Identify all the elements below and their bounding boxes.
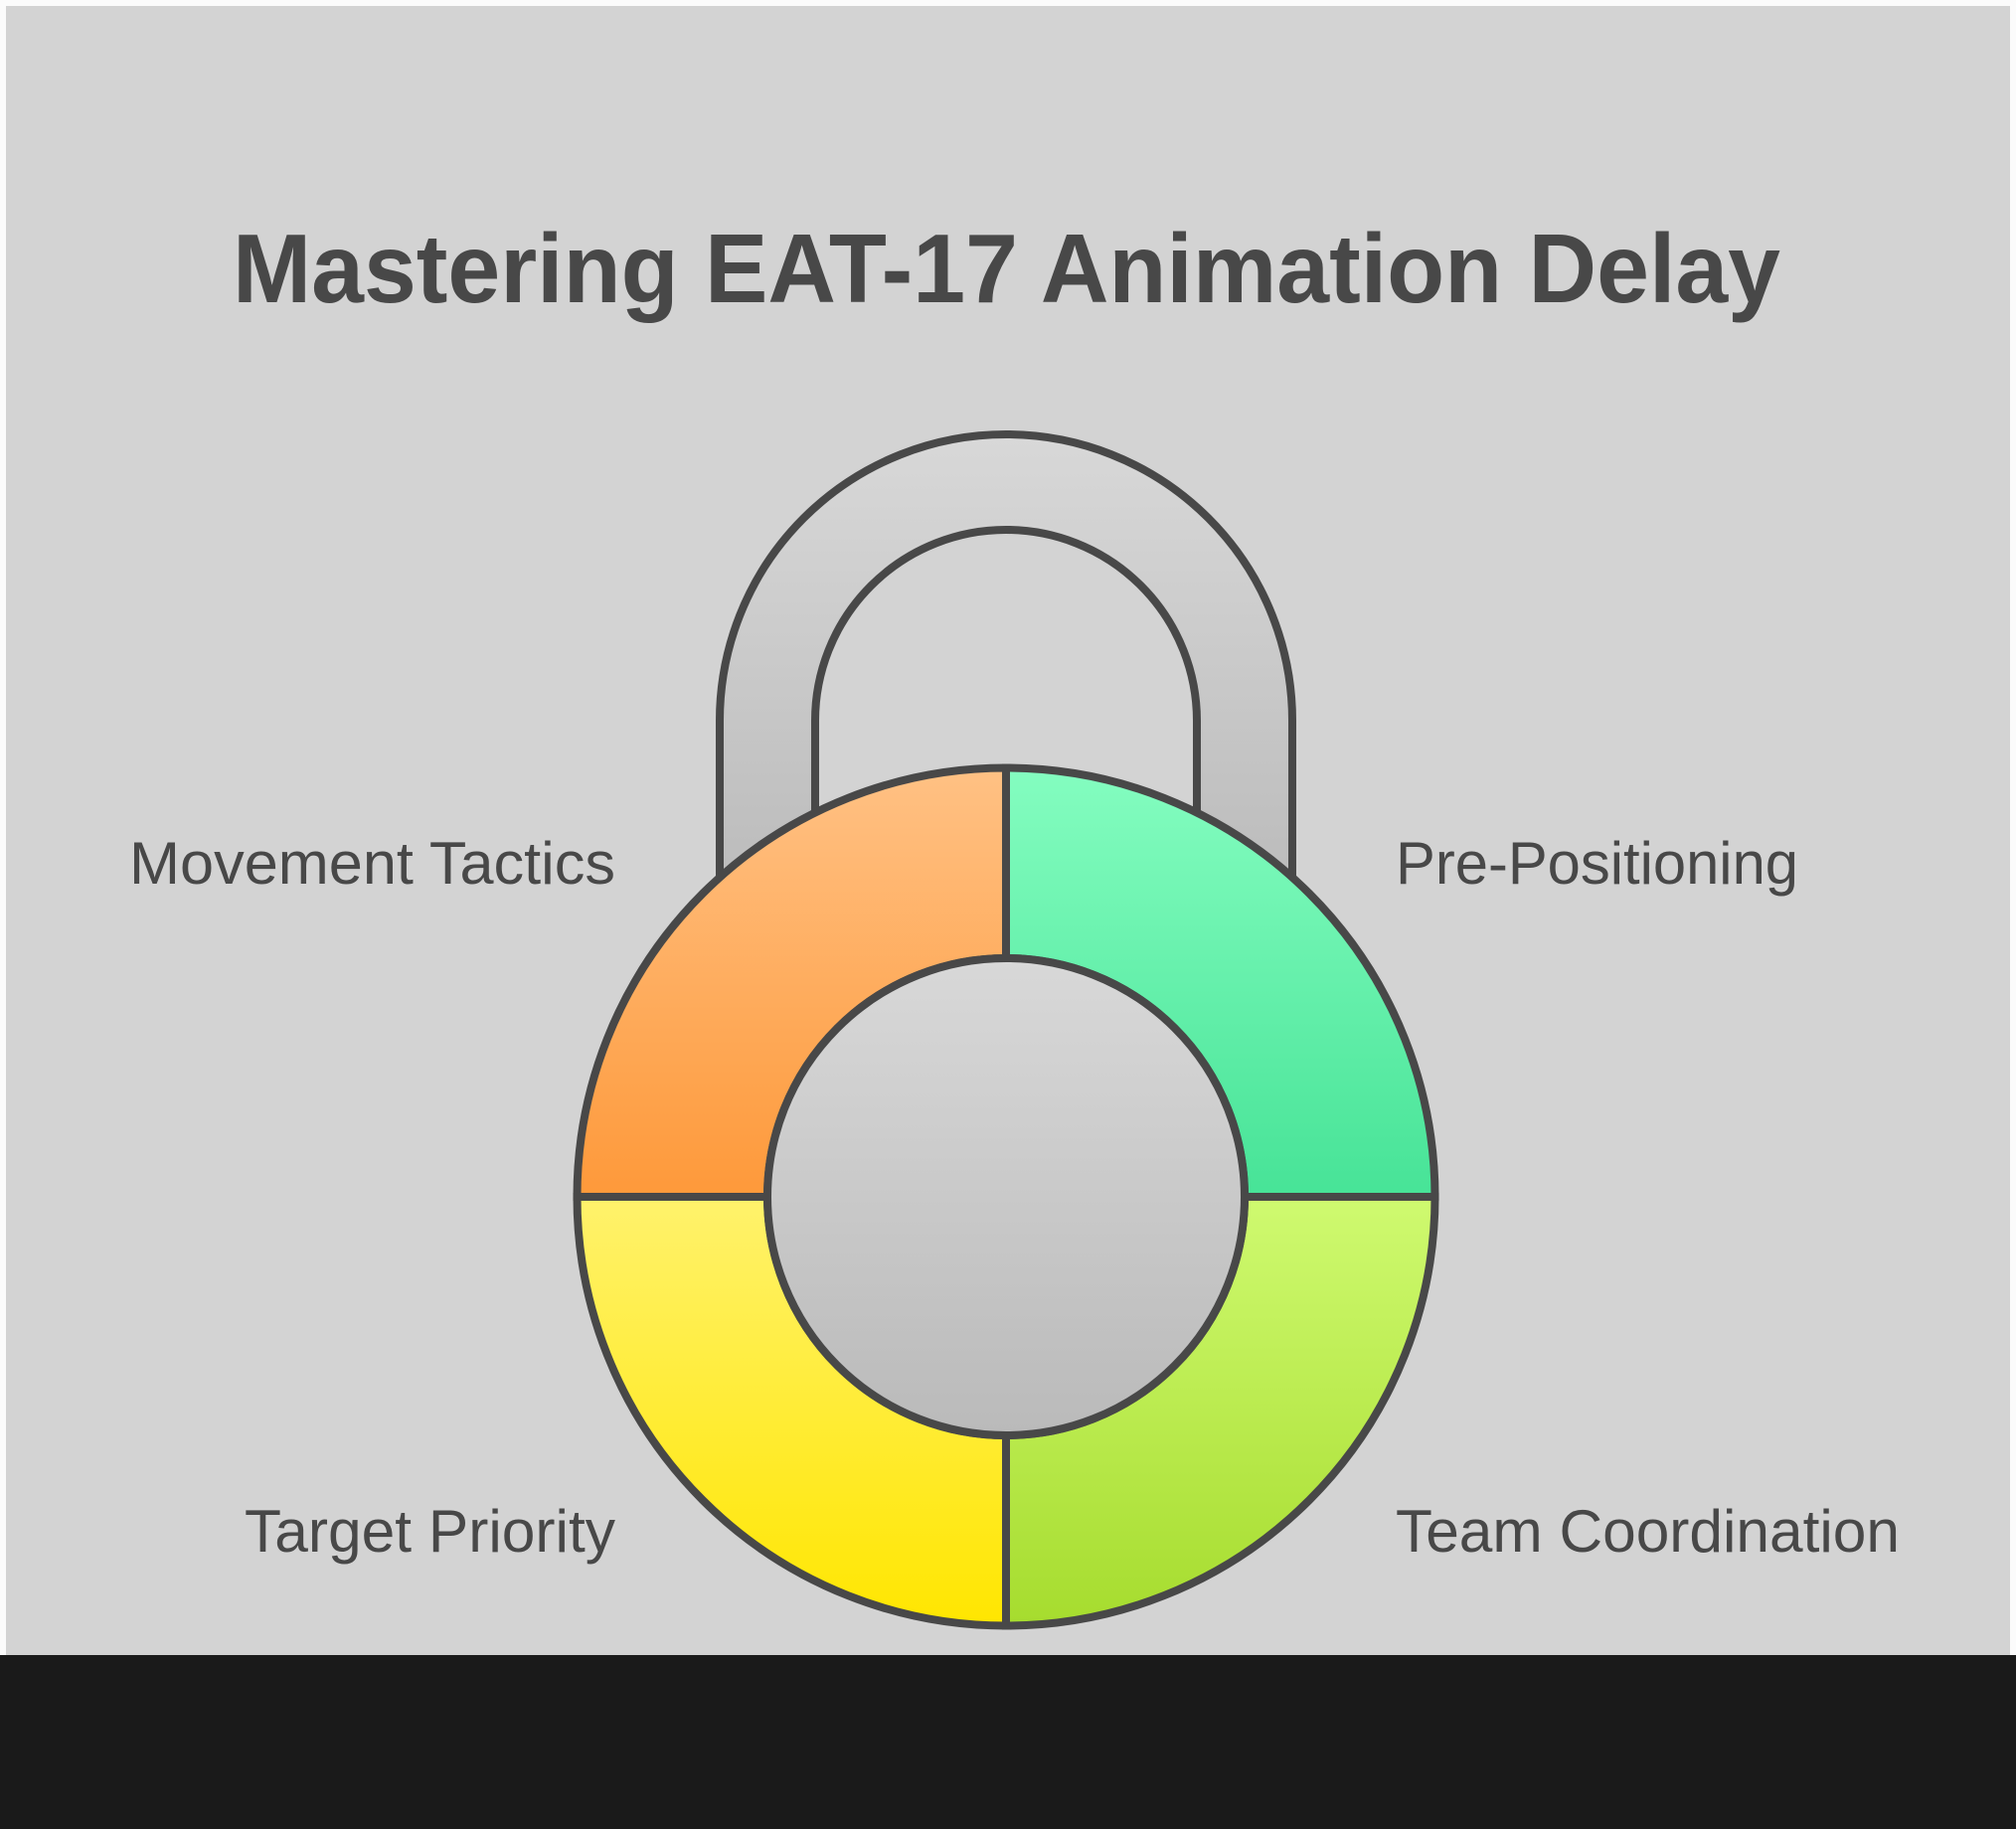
padlock diagram [577,434,1435,1626]
label: pre-positioning: Pre-Positioning [1396,830,1798,897]
segment: team coordination (lime) [1006,1197,1435,1626]
segment: pre-positioning (green) [1006,767,1435,1197]
label: team coordination: Team Coordination [1396,1498,1900,1565]
padlock center circle [767,958,1245,1435]
title: Mastering EAT-17 Animation Delay [233,214,1780,323]
bottom dark band [0,1655,2016,1829]
label: target priority: Target Priority [245,1498,615,1565]
segment: target priority (yellow) [577,1197,1006,1626]
padlock shackle [720,434,1292,895]
segment: movement tactics (orange) [577,767,1006,1197]
label: movement tactics: Movement Tactics [129,830,615,897]
